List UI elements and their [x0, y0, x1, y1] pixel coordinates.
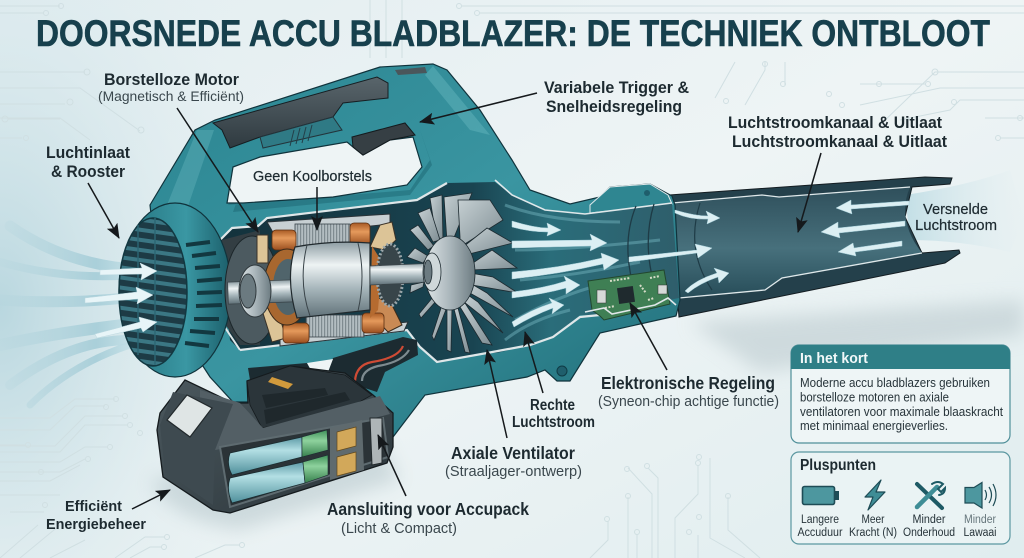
inlet airflow streams — [0, 226, 150, 405]
icon: tools — [917, 482, 945, 508]
label: axiale ventilator — [445, 443, 582, 480]
grip — [213, 67, 427, 148]
label: rechte luchtstroom: Rechte — [530, 397, 575, 414]
label: axiale ventilator: Axiale Ventilator — [451, 443, 575, 463]
label: luchtstroomkanaal: Luchtstroomkanaal & Uitlaat — [732, 133, 947, 151]
label: luchtstroomkanaal: Luchtstroomkanaal & Uitlaat — [728, 114, 942, 132]
label: aansluiting voor accupack — [327, 499, 529, 537]
label: rechte luchtstroom: Luchtstroom — [512, 414, 595, 431]
battery light panel — [167, 395, 212, 437]
icon: lightning bolt — [865, 480, 885, 510]
pluspunten heading: Pluspunten — [800, 457, 876, 474]
label: geen koolborstels: Geen Koolborstels — [253, 169, 372, 185]
connector contact — [370, 418, 382, 465]
label: luchtinlaat: & Rooster — [51, 163, 126, 181]
label: borstelloze motor: Borstelloze Motor — [104, 71, 240, 89]
label: versnelde luchtstroom — [915, 201, 997, 234]
label: aansluiting voor accupack: (Licht & Compact) — [341, 521, 457, 537]
panel body text: Moderne accu bladblazers gebruiken — [800, 375, 990, 390]
handle opening — [227, 137, 422, 203]
label: luchtinlaat: Luchtinlaat — [46, 144, 130, 162]
panel header — [791, 345, 1010, 369]
icon: speaker — [965, 482, 996, 508]
panel: pluspunten — [791, 452, 1010, 544]
panel heading text: In het kort — [800, 350, 868, 367]
benefit labels: Lawaai — [964, 527, 996, 539]
callout arrows — [88, 93, 821, 509]
icon: battery — [802, 486, 839, 504]
label: variabele trigger: Variabele Trigger & — [544, 79, 689, 97]
label: versnelde luchtstroom: Versnelde — [923, 201, 988, 218]
electronic control board — [585, 270, 676, 320]
flow streaks — [505, 205, 660, 340]
lower bracket screw — [557, 366, 567, 376]
label: aansluiting voor accupack: Aansluiting voor Accupack — [327, 499, 529, 519]
benefit labels: Accuduur — [798, 527, 843, 539]
main housing and handle — [150, 64, 680, 437]
label: variabele trigger — [544, 79, 689, 116]
label: versnelde luchtstroom: Luchtstroom — [915, 217, 997, 234]
benefit labels: Onderhoud — [903, 527, 955, 539]
benefit labels: Kracht (N) — [849, 527, 897, 539]
benefit labels: Minder — [964, 514, 996, 526]
label: elektronische regeling: (Syneon-chip achtige functie) — [598, 394, 779, 410]
label: axiale ventilator: (Straaljager-ontwerp) — [445, 464, 582, 480]
inlet arrow heads — [85, 263, 157, 338]
benefit labels — [798, 514, 996, 539]
blower body — [150, 64, 960, 437]
label: elektronische regeling: Elektronische Regeling — [601, 373, 775, 393]
axial fan — [407, 193, 518, 353]
label: variabele trigger: Snelheidsregeling — [546, 98, 682, 116]
cutaway chamber — [220, 182, 679, 362]
tube seam — [628, 204, 660, 306]
label: borstelloze motor — [98, 71, 244, 104]
label: efficient energiebeheer — [46, 498, 146, 533]
fan hub — [423, 236, 475, 310]
panel body text: borstelloze motoren en axiale — [800, 390, 949, 404]
benefit labels: Minder — [912, 514, 946, 526]
label: borstelloze motor: (Magnetisch & Efficiënt) — [98, 88, 244, 104]
label: efficient energiebeheer: Energiebeheer — [46, 516, 146, 533]
label: rechte luchtstroom — [512, 397, 595, 431]
battery pack — [157, 366, 393, 513]
panel body text — [800, 375, 1003, 433]
label: luchtinlaat — [46, 144, 130, 181]
battery cells window — [220, 418, 388, 507]
outlet airflow stream — [905, 170, 1024, 252]
air intake housing with grille — [119, 203, 231, 377]
flow arrows inside blower — [512, 200, 909, 327]
trigger — [352, 123, 415, 155]
benefit labels: Langere — [801, 514, 839, 526]
panel body text: met minimaal energieverlies. — [800, 418, 948, 433]
panel body text: ventilatoren voor maximale blaaskracht — [800, 404, 1003, 419]
label: elektronische regeling — [598, 373, 779, 410]
benefit labels: Meer — [862, 514, 885, 526]
cavity under motor with wires — [248, 337, 418, 392]
motor cutaway — [225, 214, 438, 346]
copper coils — [272, 223, 384, 343]
upper ridge on tube clamp — [590, 184, 672, 213]
label: efficient energiebeheer: Efficiënt — [65, 498, 122, 515]
tube nozzle — [625, 177, 960, 317]
panel: in het kort — [791, 345, 1010, 443]
label: luchtstroomkanaal — [728, 114, 947, 151]
